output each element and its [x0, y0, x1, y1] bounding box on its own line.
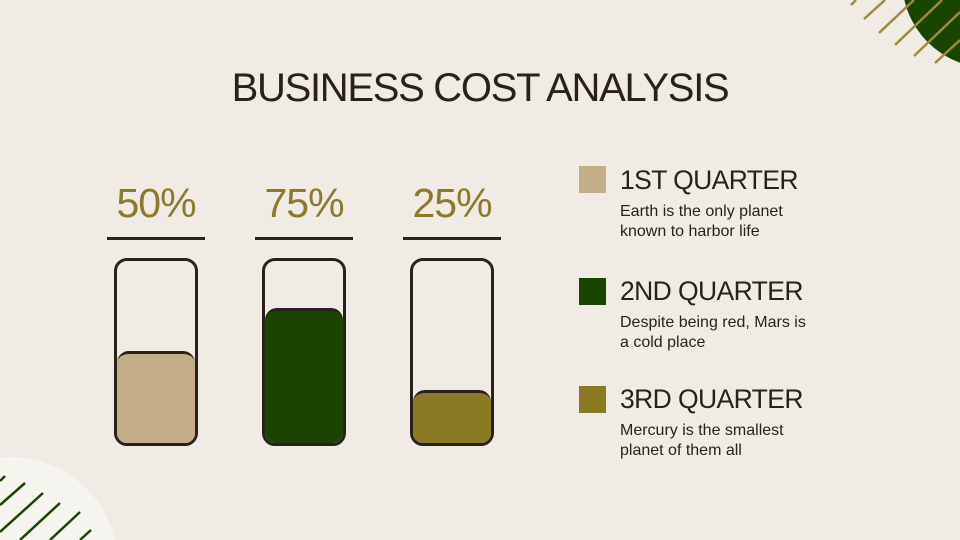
chart: bar 3: 25% [412, 180, 492, 226]
legend 2: a cold place [620, 334, 705, 351]
chart: bar 1 [107, 180, 205, 446]
chart: bar 2 [255, 180, 353, 446]
legend 3 [579, 384, 803, 459]
legend 1: known to harbor life [620, 223, 760, 240]
chart: bar 2: 75% [264, 180, 344, 226]
chart: bar 1: 50% [116, 180, 196, 226]
legend 2: Despite being red, Mars is [620, 314, 806, 331]
legend 3: Mercury is the smallest [620, 422, 784, 439]
legend 1: 1ST QUARTER [620, 165, 798, 195]
legend 1 [579, 165, 798, 240]
legend 3: planet of them all [620, 442, 742, 459]
legend 1: Earth is the only planet [620, 203, 783, 220]
legend 2: 2ND QUARTER [620, 276, 803, 306]
legend 2 [579, 276, 806, 351]
chart: bar 3 [403, 180, 501, 446]
title: BUSINESS COST ANALYSIS [232, 66, 728, 110]
legend 3: 3RD QUARTER [620, 384, 803, 414]
